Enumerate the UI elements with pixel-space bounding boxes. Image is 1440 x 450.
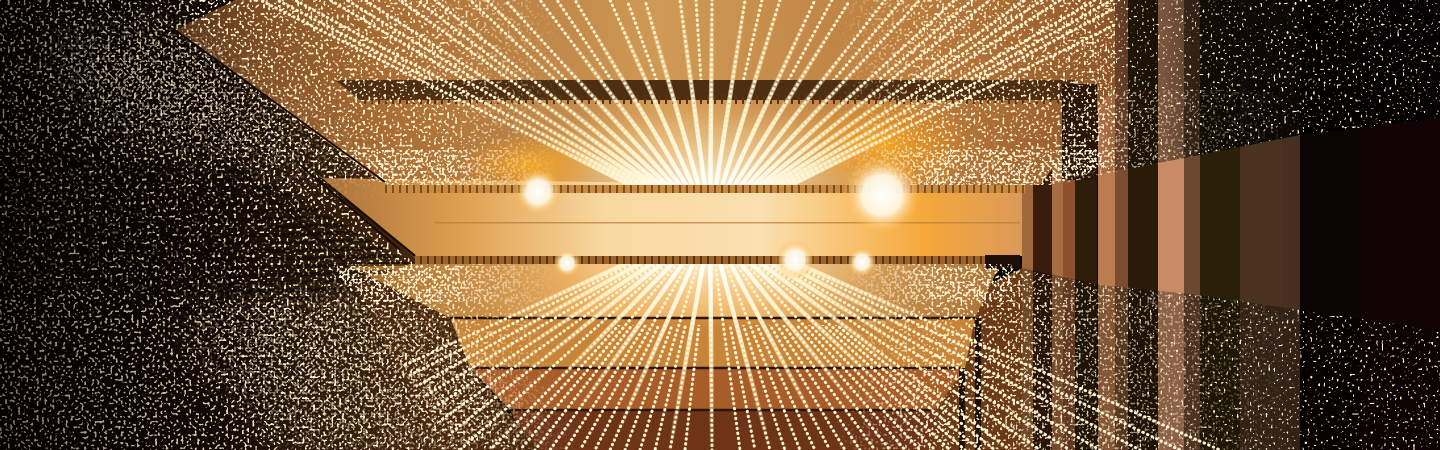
speckle lights: floor sides	[330, 264, 1020, 450]
upper rail	[385, 185, 1025, 193]
left floor wedge	[345, 264, 540, 450]
speckle lights: left upper band	[27, 2, 380, 200]
floor right posts	[962, 318, 978, 450]
light strings: upper	[260, 0, 1115, 185]
warm hotspot right	[795, 95, 975, 195]
window block	[1062, 84, 1097, 180]
left wall	[0, 0, 440, 450]
floor tiers	[345, 200, 1022, 450]
central wall	[320, 178, 1025, 269]
column shade bottom	[1022, 268, 1440, 450]
lower rail	[415, 256, 1005, 264]
horizontal rows	[0, 150, 410, 300]
lit ceiling	[500, 90, 920, 270]
floor lines	[450, 318, 975, 410]
lamp glows	[514, 155, 922, 280]
speckle lights: left lower band	[140, 280, 580, 450]
light strings: upper outer additions	[278, 0, 1114, 80]
speckle lights: bottom right	[1010, 262, 1440, 450]
ceiling	[175, 0, 1115, 270]
dark recess	[985, 255, 1020, 269]
light strings: lower outer additions	[513, 325, 994, 450]
light strings: lower	[401, 264, 1220, 450]
structural diagonals	[175, 30, 400, 262]
ceiling beam	[335, 80, 1075, 100]
speckle lights: top right	[1060, 0, 1440, 190]
lit floor	[500, 200, 920, 330]
speckle lights: ceiling sides	[175, 0, 1120, 190]
speckle lights: left field	[0, 0, 520, 450]
right side columns	[1022, 0, 1440, 450]
column shade top	[1100, 0, 1440, 174]
warm hotspot left	[460, 135, 600, 195]
left fade	[0, 0, 280, 450]
